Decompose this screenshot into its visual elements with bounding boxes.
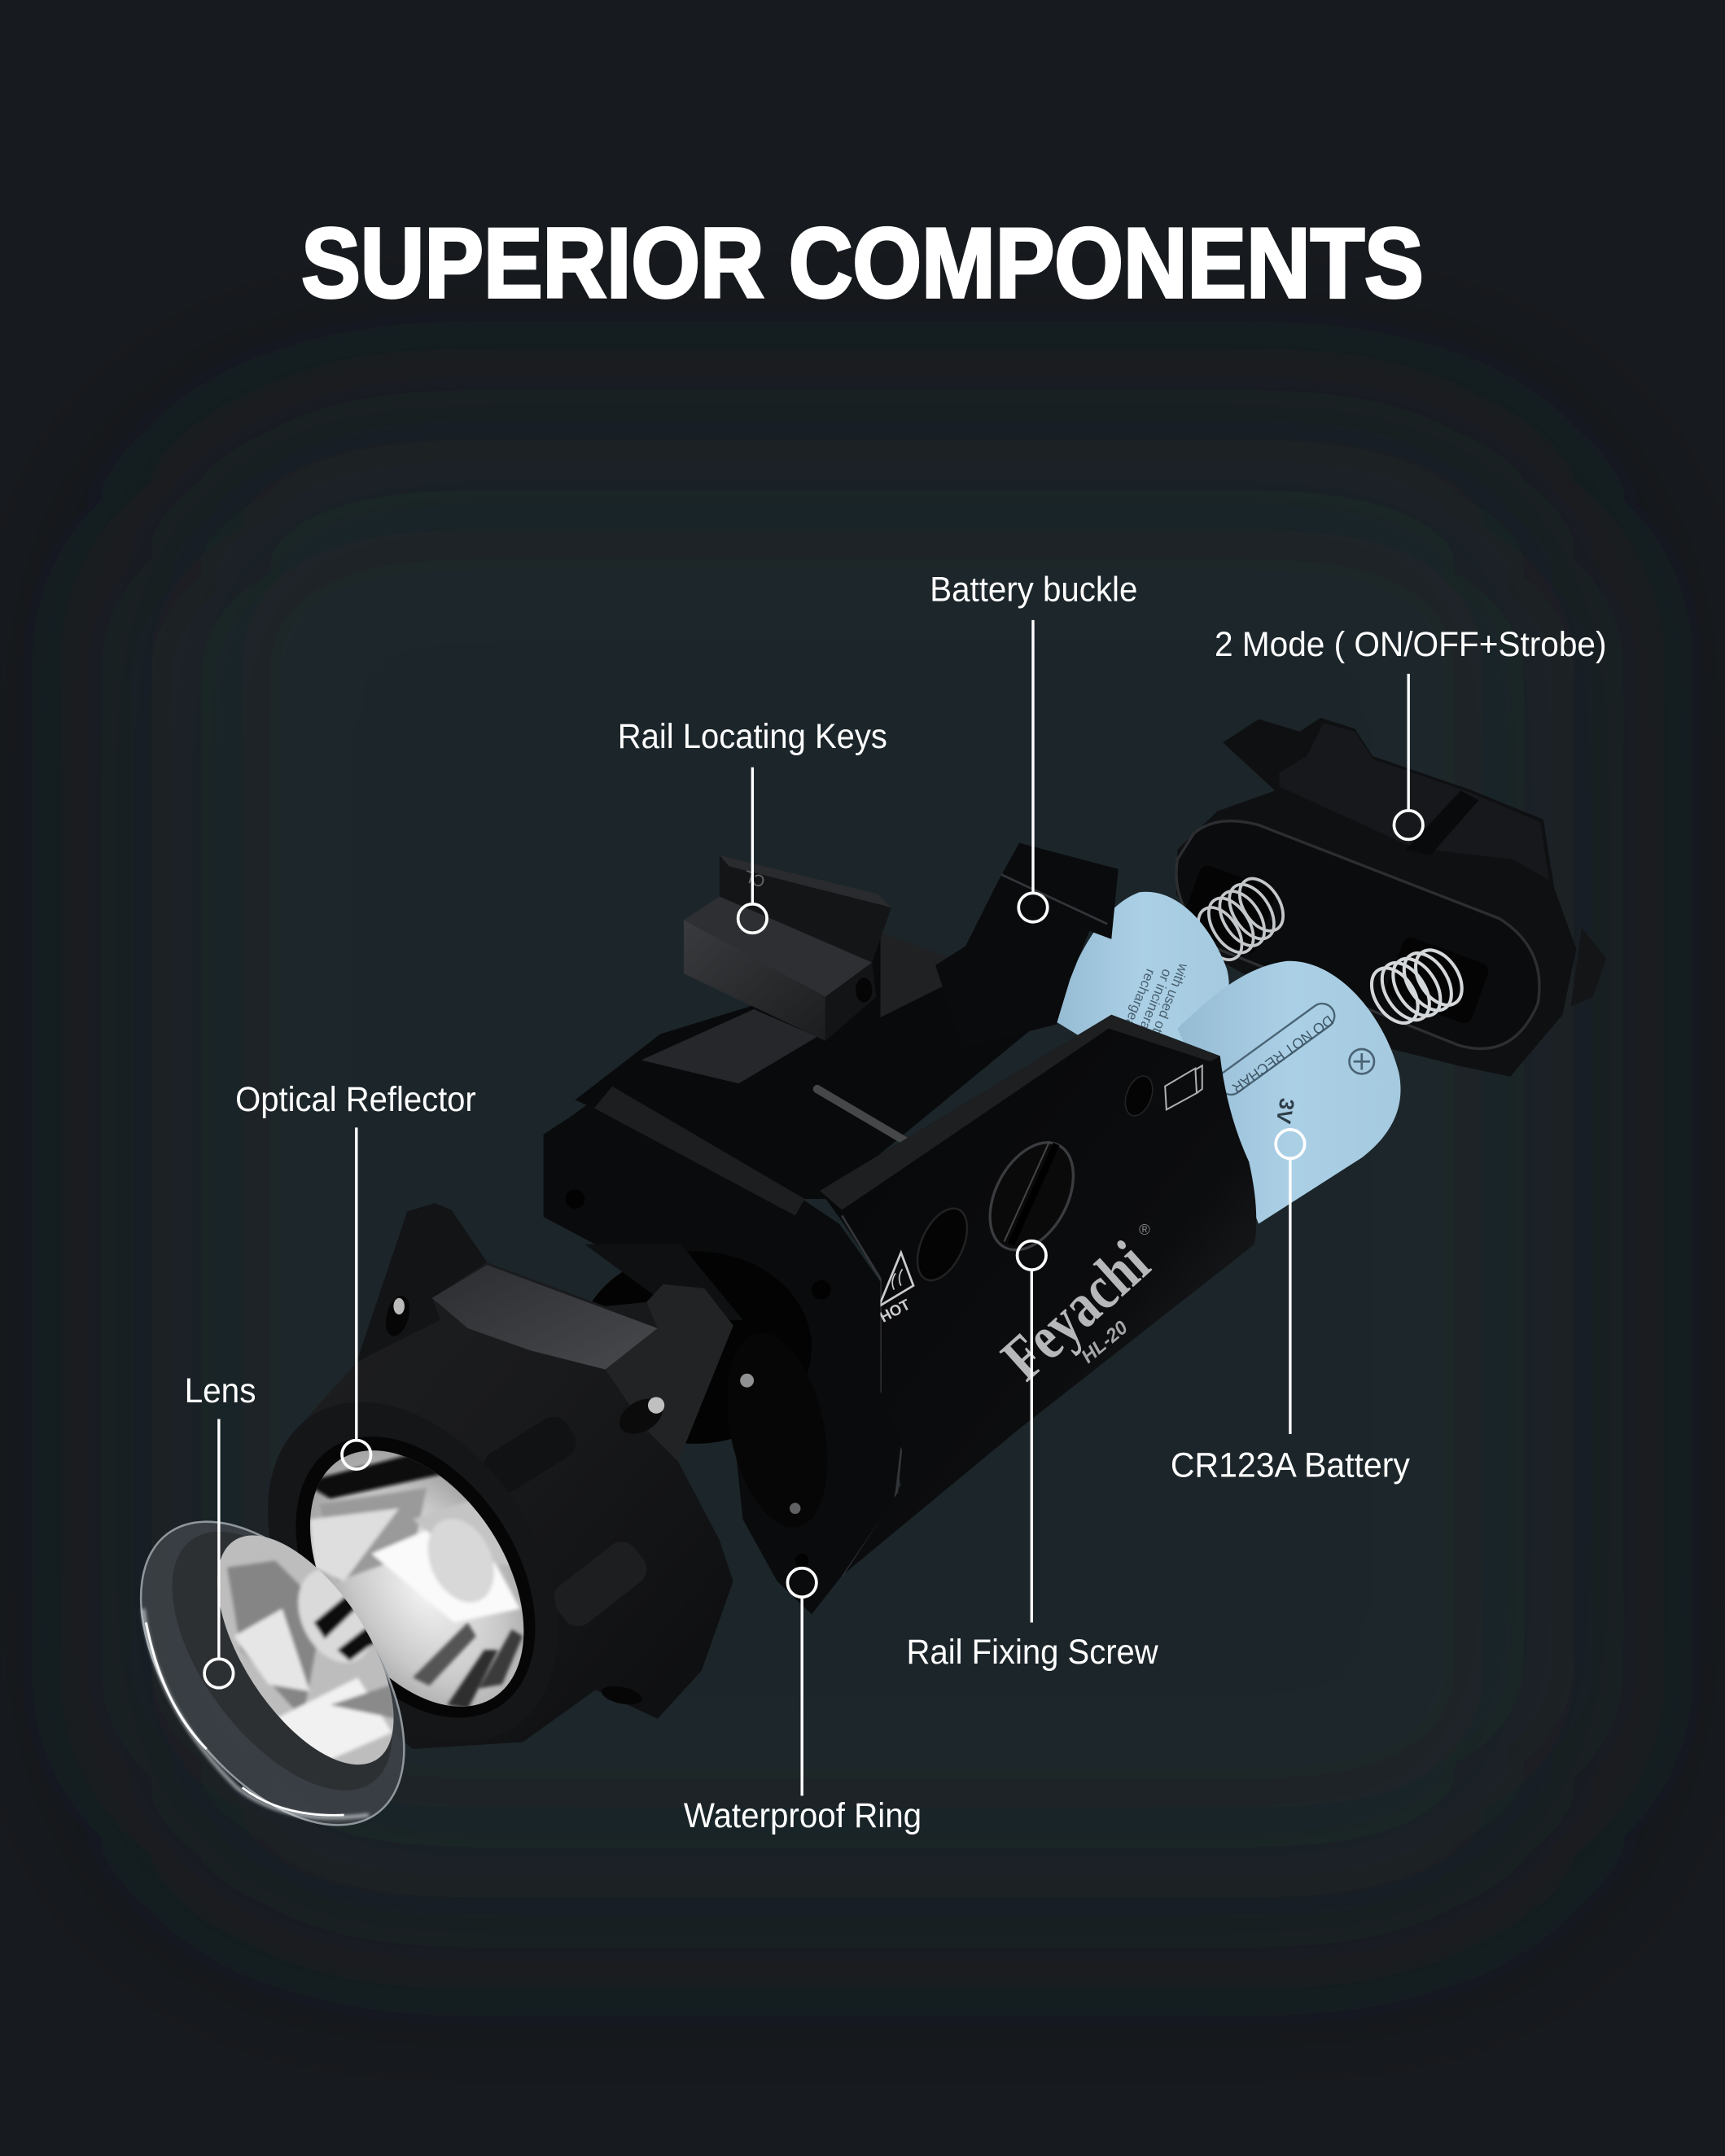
callout: rail fixing screw bbox=[907, 1241, 1158, 1671]
battery front: DO NOT RECHAR bbox=[1229, 1012, 1337, 1096]
callout: CR123A battery bbox=[1171, 1130, 1411, 1484]
screw top bbox=[382, 1293, 414, 1339]
callout: battery buckle bbox=[930, 570, 1137, 922]
callout: rail locating keys bbox=[618, 717, 887, 933]
callout: 2 mode switch: 2 Mode ( ON/OFF+Strobe) bbox=[1215, 625, 1606, 663]
battery front bbox=[1177, 961, 1401, 1224]
lens bbox=[139, 1520, 405, 1826]
rail channel bbox=[575, 932, 1059, 1199]
callout: CR123A battery: CR123A Battery bbox=[1171, 1445, 1411, 1484]
logo: HL-20 bbox=[1078, 1317, 1132, 1367]
outer ring bbox=[208, 1349, 618, 1795]
battery rear: or incinerate. Do bbox=[1123, 967, 1175, 1066]
screw bbox=[973, 1129, 1090, 1264]
mount plate bbox=[544, 1087, 901, 1614]
icon: hot warning bbox=[877, 1253, 913, 1326]
callout: rail locating keys: Rail Locating Keys bbox=[618, 717, 887, 755]
battery rear bbox=[1053, 892, 1229, 1078]
battery rear: with used other batt bbox=[1132, 960, 1192, 1078]
title: SUPERIOR COMPONENTS bbox=[301, 208, 1424, 318]
spring 2 bbox=[1362, 942, 1471, 1031]
end plate with springs bbox=[1176, 718, 1606, 1077]
optical reflector bbox=[309, 1450, 524, 1707]
flashlight illustration bbox=[88, 718, 1606, 1873]
callout: rail fixing screw: Rail Fixing Screw bbox=[907, 1633, 1158, 1671]
rail locating key: CL bbox=[742, 866, 768, 890]
head bbox=[208, 1203, 733, 1795]
callout: waterproof ring: Waterproof Ring bbox=[684, 1796, 922, 1835]
main housing bbox=[820, 1015, 1256, 1576]
battery buckle bbox=[935, 843, 1119, 1047]
logo: Feyachi bbox=[988, 1227, 1162, 1393]
callout: waterproof ring bbox=[684, 1568, 922, 1835]
rail locating key bbox=[684, 855, 891, 1041]
screw right bbox=[613, 1392, 669, 1441]
callout: lens: Lens bbox=[185, 1371, 256, 1410]
battery rear: rechargeable bbox=[1114, 967, 1158, 1047]
callout: optical reflector: Optical Reflector bbox=[235, 1080, 476, 1118]
spring 1 bbox=[1189, 871, 1292, 968]
battery front: 3V bbox=[1272, 1096, 1298, 1126]
grooves bbox=[477, 1410, 582, 1499]
callout: 2 mode switch bbox=[1215, 625, 1606, 839]
icon: battery bbox=[1165, 1065, 1202, 1109]
icon: hot warning: HOT bbox=[877, 1295, 913, 1326]
callout: lens bbox=[185, 1371, 256, 1688]
housing hole bbox=[908, 1200, 977, 1288]
callout: battery buckle: Battery buckle bbox=[930, 570, 1137, 608]
callout: optical reflector bbox=[235, 1080, 476, 1469]
flat slab bbox=[432, 1265, 658, 1370]
logo: ® bbox=[1139, 1221, 1150, 1238]
